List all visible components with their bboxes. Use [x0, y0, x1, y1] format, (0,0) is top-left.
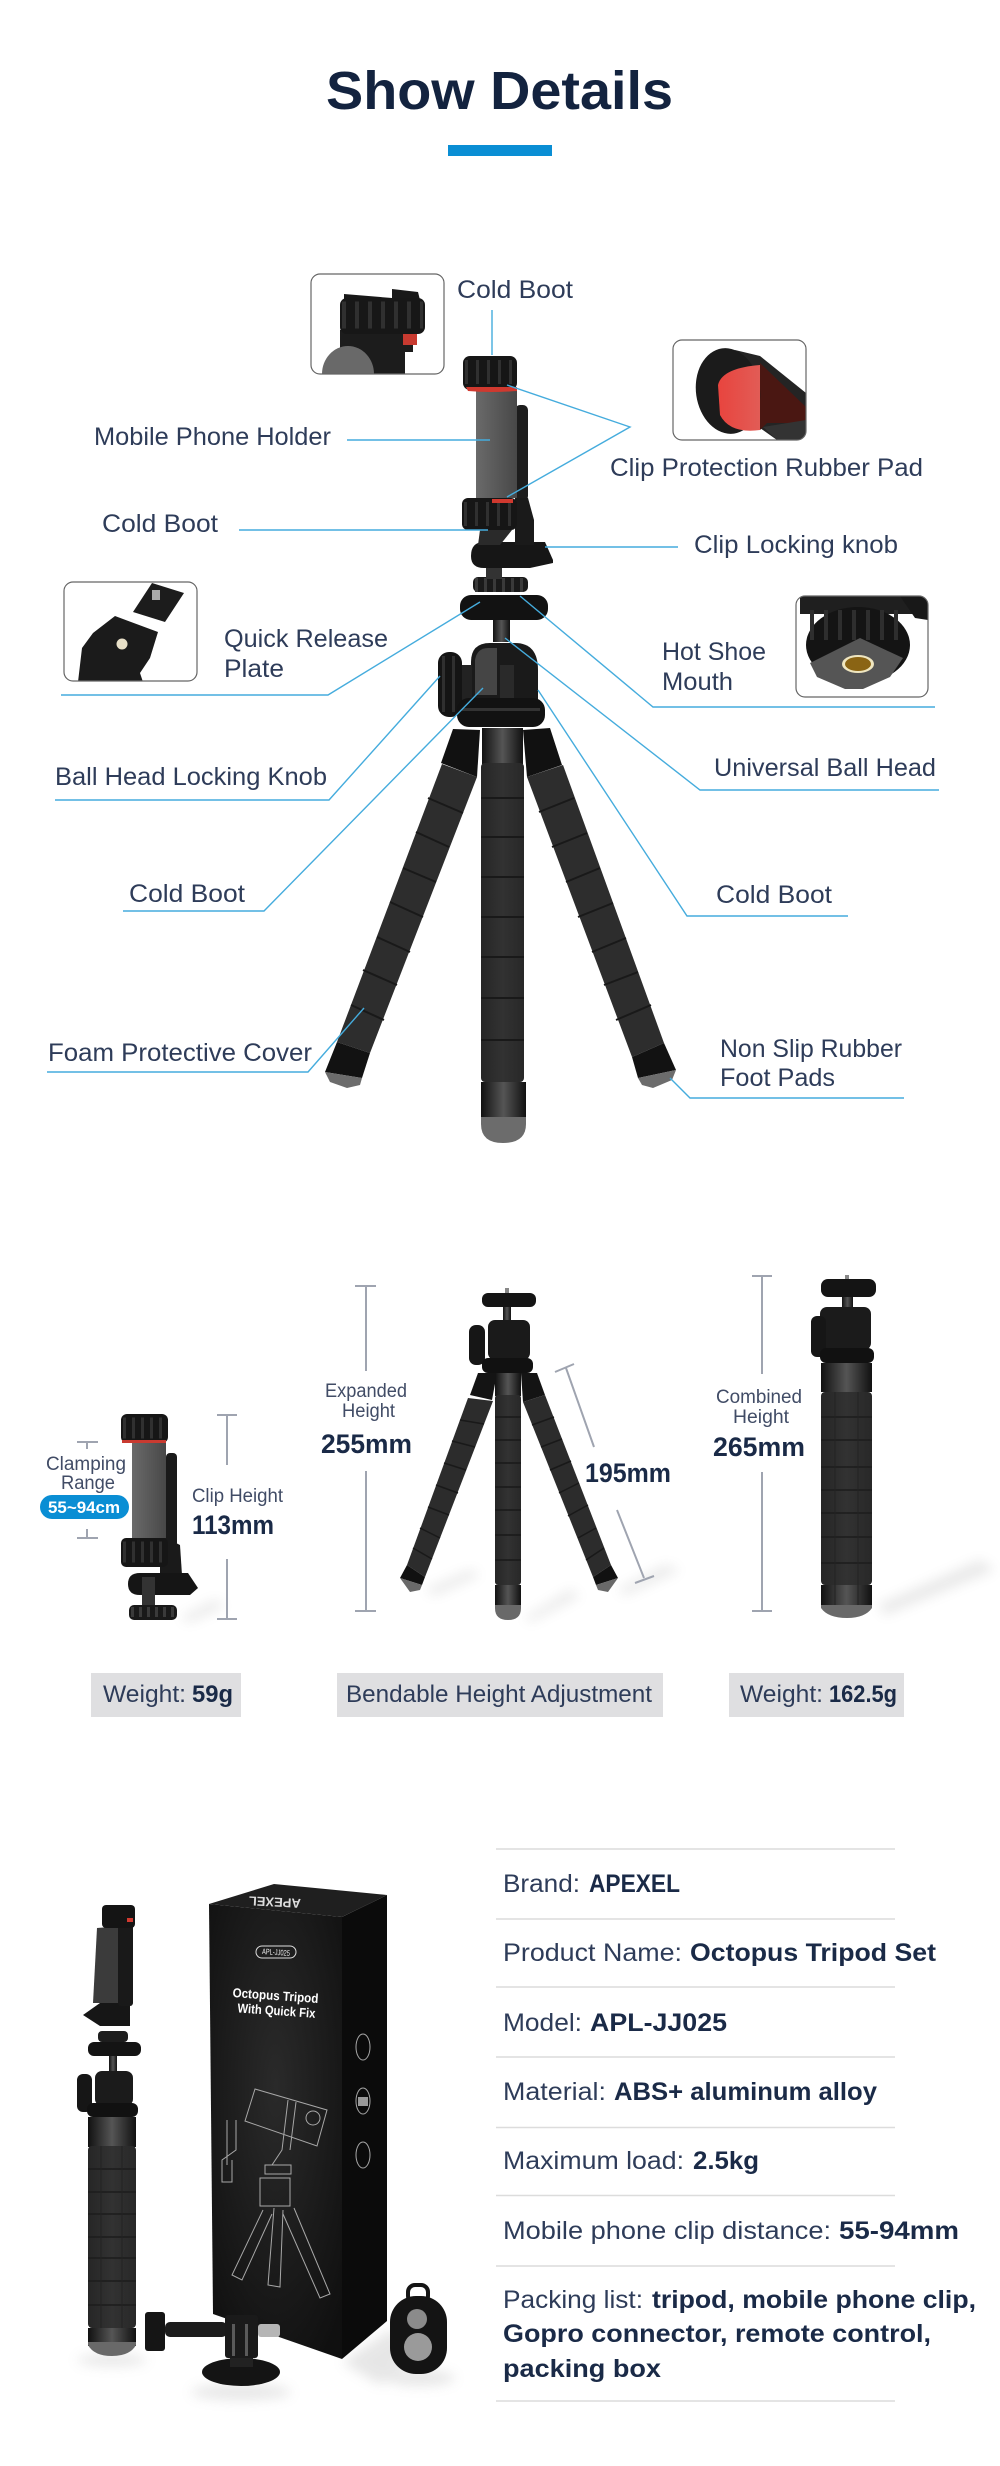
- label: ball head locking knob: Ball Head Locking Knob: [55, 763, 327, 791]
- combined height dimension: 265mm: [713, 1432, 805, 1462]
- combined height dimension: Combined: [716, 1387, 802, 1408]
- caption: bendable height adjustment: Bendable Height Adjustment: [346, 1681, 652, 1708]
- caption: bendable height adjustment: [337, 1673, 663, 1717]
- spec: material: ABS+ aluminum alloy: [614, 2078, 877, 2106]
- box model pill: APL-JJ025: [262, 1947, 291, 1958]
- spec: maximum load: [503, 2147, 759, 2175]
- panel: dimensions: [40, 1275, 995, 1717]
- phone clip side view: [121, 1414, 198, 1620]
- label: foam protective cover: Foam Protective Cover: [48, 1039, 312, 1067]
- table rules: [496, 1849, 895, 2401]
- spec: product name: Product Name:: [503, 1939, 682, 1967]
- spec: maximum load: 2.5kg: [693, 2147, 759, 2175]
- spec: product name: Octopus Tripod Set: [690, 1939, 937, 1967]
- combined height dimension: [713, 1276, 805, 1611]
- label: quick release plate: [61, 602, 480, 695]
- leg length dimension: 195mm: [585, 1458, 671, 1488]
- spec: brand: APEXEL: [589, 1870, 680, 1898]
- expanded height dimension: Expanded: [325, 1381, 407, 1402]
- box line drawing: [222, 2089, 330, 2298]
- label: hot shoe mouth: [520, 596, 935, 707]
- expanded height dimension: Height: [342, 1401, 396, 1422]
- caption: weight 59g: Weight:: [103, 1681, 186, 1708]
- mounting plate: [460, 542, 553, 620]
- spec: clip distance: Mobile phone clip distance:: [503, 2217, 831, 2245]
- shadows under products: [180, 1560, 995, 1622]
- spec: model: APL-JJ025: [590, 2009, 727, 2037]
- label: cold boot lower left: [123, 688, 483, 911]
- spec: packing list: tripod, mobile phone clip,: [652, 2286, 976, 2314]
- expanded height dimension: 255mm: [321, 1429, 412, 1459]
- label: quick release plate: Quick Release: [224, 625, 388, 653]
- caption: weight 162.5g: 162.5g: [829, 1681, 897, 1708]
- spec: packing list: [503, 2286, 976, 2383]
- spec: packing list: packing box: [503, 2355, 661, 2383]
- label: non slip rubber foot pads: Non Slip Rubber: [720, 1035, 902, 1063]
- label: hot shoe mouth: Hot Shoe: [662, 638, 766, 666]
- spec: clip distance: [503, 2217, 959, 2245]
- clamping range dimension: Range: [61, 1473, 115, 1494]
- spec: model: Model:: [503, 2009, 582, 2037]
- main tripod product image: [325, 356, 676, 1143]
- label: clip protection rubber pad: [507, 385, 923, 497]
- label: clip locking knob: Clip Locking knob: [694, 531, 898, 559]
- caption: weight 59g: [91, 1673, 241, 1717]
- label: non slip rubber foot pads: [670, 1035, 904, 1098]
- clip height dimension: Clip Height: [192, 1486, 284, 1507]
- spec: brand: Brand:: [503, 1870, 580, 1898]
- expanded height dimension: [321, 1286, 412, 1611]
- label: hot shoe mouth: Mouth: [662, 668, 733, 696]
- label: quick release plate: Plate: [224, 655, 284, 683]
- box side icons: [356, 2034, 370, 2168]
- label: cold boot lower left: Cold Boot: [129, 880, 245, 908]
- spec: material: Material:: [503, 2078, 606, 2106]
- label: non slip rubber foot pads: Foot Pads: [720, 1064, 835, 1092]
- specification table: [496, 1849, 976, 2401]
- spec: packing list: Gopro connector, remote control,: [503, 2320, 931, 2348]
- leg length dimension: [555, 1364, 671, 1583]
- label: cold boot top: Cold Boot: [457, 276, 573, 304]
- panel: package contents: [77, 1849, 976, 2401]
- left leg: [325, 729, 480, 1088]
- remote control: [390, 2285, 447, 2374]
- label: cold boot left: Cold Boot: [102, 510, 218, 538]
- spec: brand: [503, 1870, 680, 1898]
- box model pill: [256, 1946, 296, 1958]
- clip height dimension: 113mm: [192, 1510, 274, 1540]
- label: universal ball head: Universal Ball Head: [714, 754, 936, 782]
- clip height dimension: [192, 1415, 284, 1619]
- right leg: [523, 728, 676, 1088]
- combined tripod: [811, 1275, 876, 1618]
- label: cold boot top: [457, 276, 573, 355]
- title accent bar: [448, 145, 552, 156]
- centre leg: [481, 728, 526, 1143]
- spec: model: [503, 2009, 727, 2037]
- inset: hot shoe mouth close-up: [796, 596, 930, 697]
- caption: weight 162.5g: Weight:: [740, 1681, 823, 1708]
- label: cold boot lower right: [538, 690, 848, 916]
- clamping range dimension: Clamping: [46, 1454, 126, 1475]
- label: ball head locking knob: [55, 676, 440, 800]
- inset: quick release plate close-up: [64, 582, 197, 682]
- clamping range dimension: [40, 1442, 129, 1538]
- label: mobile phone holder: Mobile Phone Holder: [94, 423, 331, 451]
- title: Show Details: [326, 61, 673, 121]
- panel: annotated tripod: [47, 274, 939, 1143]
- label: foam protective cover: [47, 1008, 364, 1072]
- inset: clip rubber pad close-up: [673, 340, 806, 440]
- spec: product name: [503, 1939, 937, 1967]
- clamping range dimension: 55~94cm: [48, 1498, 120, 1517]
- label: cold boot lower right: Cold Boot: [716, 881, 832, 909]
- caption: weight 59g: 59g: [192, 1681, 233, 1708]
- ball head: [438, 618, 545, 727]
- shadow: [77, 2330, 455, 2400]
- spec: clip distance: 55-94mm: [839, 2217, 959, 2245]
- box title: Octopus Tripod: [232, 1985, 319, 2006]
- tripod with phone clip: [77, 1905, 141, 2356]
- label: clip protection rubber pad: Clip Protection Rubber Pad: [610, 454, 923, 482]
- expanded tripod: [400, 1288, 618, 1620]
- label: universal ball head: [505, 638, 939, 790]
- spec: maximum load: Maximum load:: [503, 2147, 684, 2175]
- spec: material: [503, 2078, 877, 2106]
- box title: With Quick Fix: [237, 2000, 317, 2021]
- caption: weight 162.5g: [729, 1673, 904, 1717]
- combined height dimension: Height: [733, 1407, 790, 1428]
- spec: packing list: Packing list:: [503, 2286, 643, 2314]
- phone holder: [462, 356, 534, 545]
- inset: cold boot close-up: [310, 273, 445, 375]
- box title: [231, 1985, 319, 2021]
- product box: [209, 1884, 387, 2359]
- gopro connector: [145, 2312, 280, 2386]
- box top brand: APEXEL: [248, 1893, 301, 1911]
